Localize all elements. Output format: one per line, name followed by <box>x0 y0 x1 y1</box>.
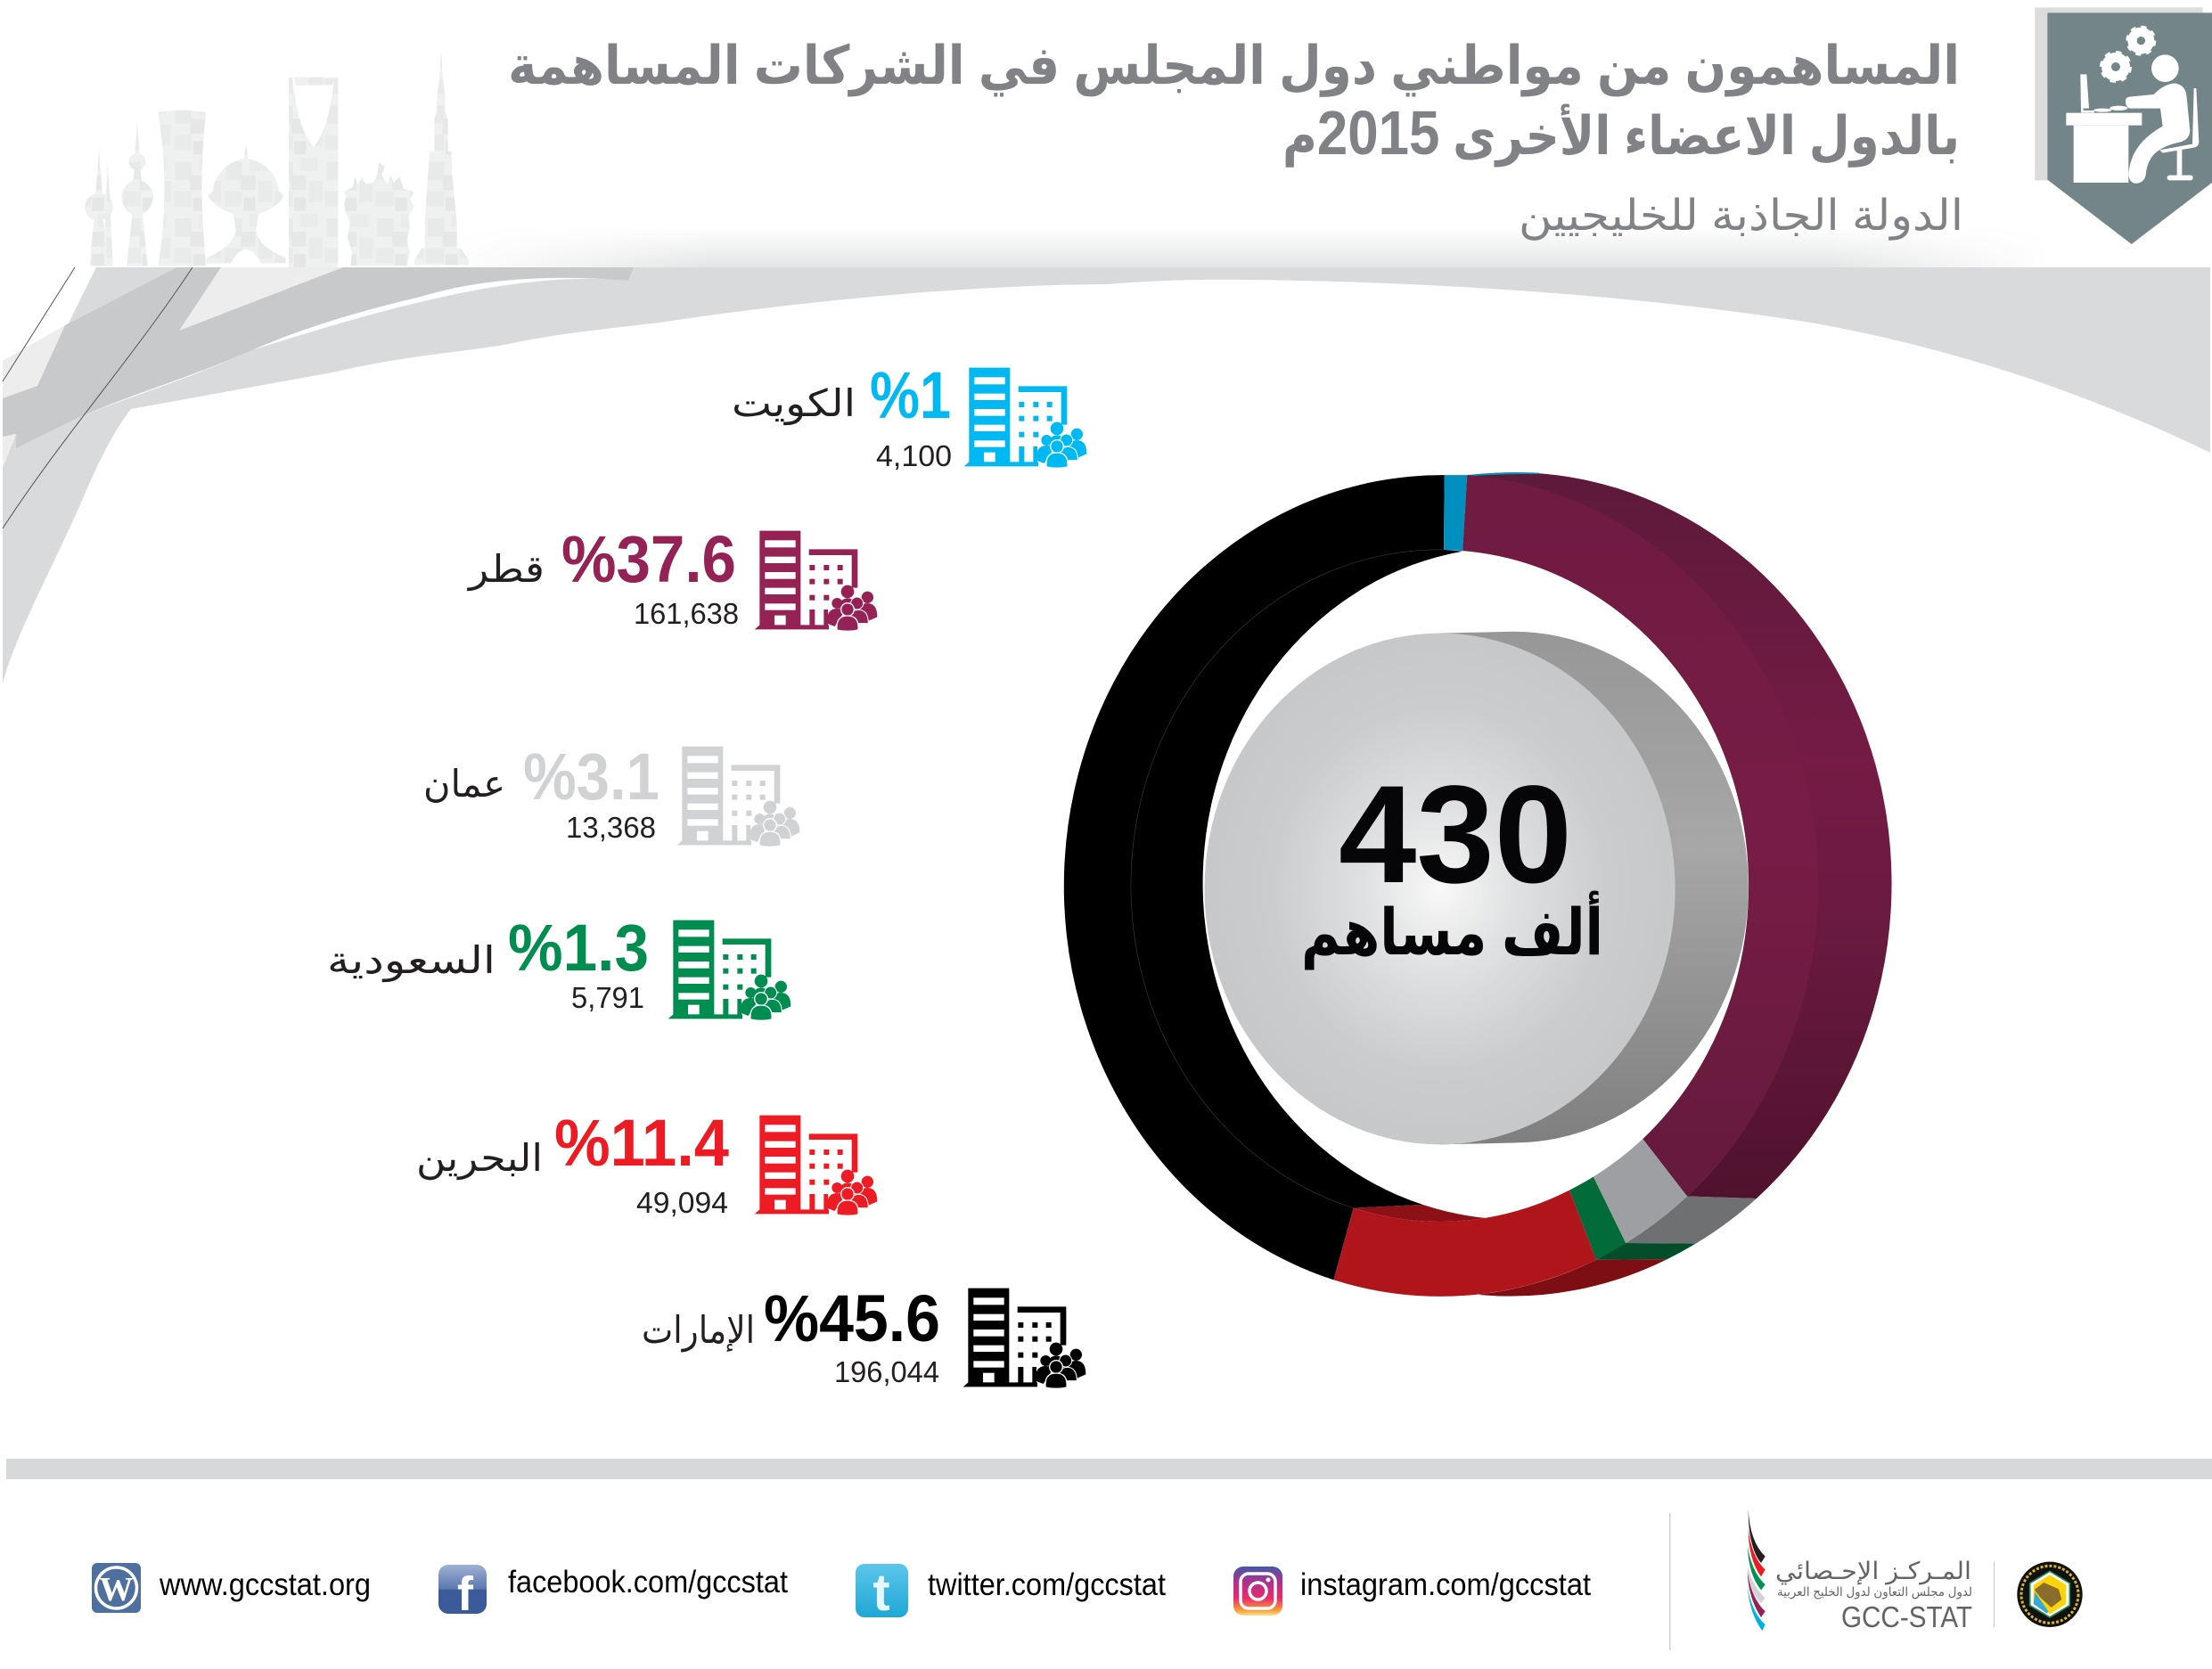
footer: website <box>92 1563 371 1613</box>
icon: shield with worker at desk <box>2035 7 2212 244</box>
title: المساهمون من مواطني دول المجلس في الشركات المساهمة <box>508 36 1960 97</box>
logo: wordmark <box>1775 1558 1972 1633</box>
Qatar name: قطر <box>467 548 545 591</box>
icon: building UAE <box>963 1289 1086 1388</box>
Bahrain name: البحرين <box>416 1137 543 1180</box>
icon: wordpress: W <box>100 1571 134 1608</box>
twitter text: twitter.com/gccstat <box>928 1567 1166 1602</box>
extrusion: Saudi Arabia <box>1596 1243 1696 1260</box>
icon: instagram <box>1233 1567 1282 1616</box>
logo divider <box>1994 1562 1995 1627</box>
Qatar percent: %37.6 <box>561 522 736 596</box>
centre disc face <box>1205 634 1675 1144</box>
subtitle: الدولة الجاذبة للخليجيين <box>1519 192 1963 241</box>
Saudi Arabia value: 5,791 <box>571 981 644 1014</box>
website text: www.gccstat.org <box>159 1567 371 1602</box>
extrusion: Kuwait <box>1467 473 1539 476</box>
Oman name: عمان <box>423 763 505 805</box>
skyline silhouette <box>85 51 469 268</box>
Saudi Arabia percent: %1.3 <box>508 911 649 985</box>
gears <box>2101 28 2154 81</box>
footer divider <box>1669 1513 1670 1650</box>
centre disc side <box>1440 632 1749 1144</box>
segment: Saudi Arabia <box>1569 1177 1626 1260</box>
title: بالدول الاعضاء الأخرى 2015م <box>1282 98 1960 168</box>
donut chart <box>1064 472 1892 1297</box>
icon: building Saudi Arabia <box>668 920 791 1020</box>
swoosh: dark band <box>3 267 634 448</box>
centre total: ألف مساهم <box>1301 890 1603 970</box>
centre total: 430 <box>1339 757 1572 912</box>
UAE percent: %45.6 <box>764 1281 940 1355</box>
Kuwait value: 4,100 <box>876 439 952 472</box>
row: Oman <box>423 740 799 847</box>
Kuwait percent: %1 <box>870 358 951 432</box>
logo: ribbon <box>1748 1509 1766 1631</box>
icon: building Qatar <box>755 531 877 631</box>
icon: twitter: t <box>873 1564 890 1622</box>
Qatar value: 161,638 <box>634 597 739 630</box>
logo: GCC seal <box>2017 1562 2083 1627</box>
logo: wordmark: المـركـز الإحـصائي <box>1775 1558 1971 1585</box>
segment: Bahrain <box>1333 1190 1596 1297</box>
row: Kuwait <box>732 358 1086 472</box>
title <box>508 36 1960 168</box>
logo: wordmark: لدول مجلس التعاون لدول الخليج العربية <box>1777 1584 1972 1599</box>
segment: Qatar <box>1462 475 1818 1196</box>
UAE value: 196,044 <box>834 1355 939 1388</box>
icon: building Kuwait <box>964 368 1086 468</box>
row: Qatar <box>467 522 877 631</box>
instagram text: instagram.com/gccstat <box>1300 1567 1591 1602</box>
swoosh: pale band <box>3 267 343 468</box>
swoosh: main light band <box>3 267 2210 683</box>
extrusion: Oman <box>1626 1196 1757 1244</box>
extrusion: Qatar <box>1467 472 1892 1199</box>
UAE name: الإمارات <box>642 1309 755 1352</box>
header gradient band <box>446 227 2050 267</box>
facebook text: facebook.com/gccstat <box>508 1565 788 1599</box>
logo: wordmark: GCC-STAT <box>1841 1600 1972 1633</box>
segment: Bahrain inner wall <box>1354 1205 1486 1222</box>
worker, desk and chair <box>2066 54 2199 184</box>
segment: Kuwait <box>1444 475 1467 551</box>
Bahrain percent: %11.4 <box>554 1106 729 1180</box>
icon: facebook <box>438 1565 487 1621</box>
row: Saudi Arabia <box>327 911 791 1020</box>
footer: twitter <box>856 1564 1166 1622</box>
icon: twitter <box>856 1564 908 1622</box>
swoosh: medium upper-left shard <box>37 267 176 386</box>
icon: building Oman <box>677 747 799 847</box>
Kuwait name: الكويت <box>732 382 856 425</box>
Saudi Arabia name: السعودية <box>327 939 496 982</box>
icon: facebook: f <box>457 1567 474 1621</box>
icon: building Bahrain <box>755 1116 877 1215</box>
footer: facebook <box>438 1565 788 1621</box>
footer: instagram <box>1233 1567 1591 1616</box>
segment: UAE seam <box>1131 550 1444 1208</box>
Oman value: 13,368 <box>566 811 656 844</box>
segment: UAE with inner wall <box>1064 475 1462 1280</box>
footer bar <box>6 1459 2212 1479</box>
row: Bahrain <box>416 1106 877 1219</box>
segment: Oman <box>1593 1139 1687 1243</box>
Bahrain value: 49,094 <box>636 1186 728 1219</box>
row: UAE <box>642 1281 1086 1388</box>
icon: wordpress <box>92 1563 141 1613</box>
Oman percent: %3.1 <box>523 740 660 814</box>
centre total <box>1301 757 1603 970</box>
extrusion: Bahrain <box>1479 1259 1667 1297</box>
swoosh: thin lines <box>3 267 193 528</box>
